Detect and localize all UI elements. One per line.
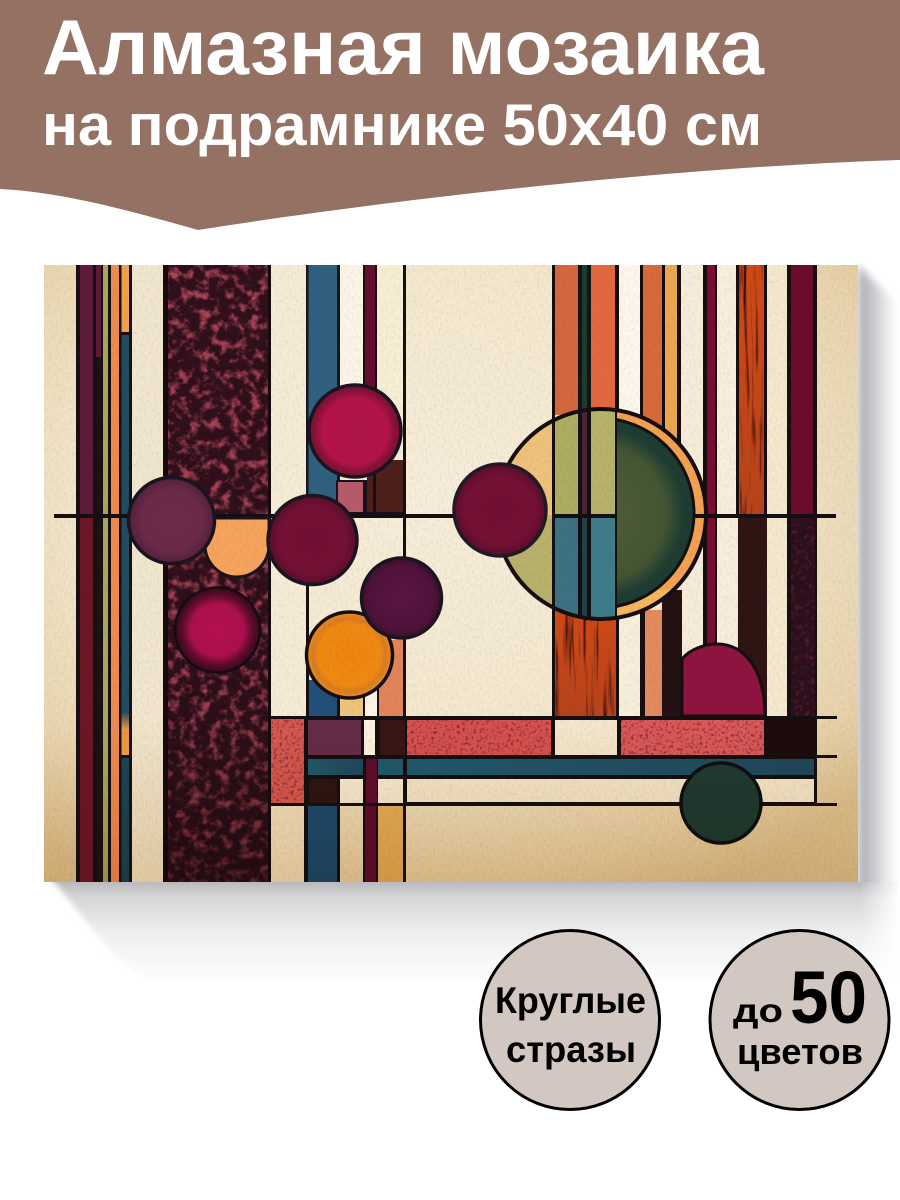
peach half circle: [205, 518, 269, 577]
circle: purple: [362, 558, 442, 638]
canvas drop shadow: [46, 265, 900, 985]
badge: round rhinestones: Круглые: [495, 980, 646, 1021]
canvas tint: [44, 720, 858, 882]
circle: dark green: [681, 763, 761, 843]
header banner: [0, 0, 900, 230]
canvas grain: [44, 265, 858, 882]
large segmented circle: [503, 407, 708, 621]
centre stripe group: [271, 265, 406, 882]
badge: round rhinestones: стразы: [506, 1029, 636, 1070]
circle: maroon centre: [268, 496, 357, 584]
badge: round rhinestones: [480, 930, 660, 1110]
circle: orange: [306, 612, 392, 698]
badge: up to 50 colours: цветов: [737, 1031, 863, 1072]
canvas artwork: [44, 265, 858, 882]
maroon dome: [682, 644, 765, 716]
title: Алмазная мозаика: Алмазная мозаика: [42, 3, 765, 91]
mottled burgundy column: [163, 265, 271, 882]
circle: crimson lower: [175, 588, 260, 672]
bottom horizontal bands: [271, 716, 837, 882]
circle: burgundy middle: [454, 464, 546, 556]
badge: up to 50 colours: 50: [790, 956, 867, 1039]
badge: up to 50 colours: до: [733, 992, 783, 1029]
circle: crimson top: [309, 385, 401, 477]
left stripe group: [76, 265, 163, 882]
subtitle: на подрамнике 50х40 см: на подрамнике 50х40 см: [42, 93, 762, 158]
right stripe group: [552, 265, 817, 716]
badge: up to 50 colours: [710, 930, 889, 1110]
circle: plum: [128, 478, 214, 564]
long horizontal line: [54, 514, 836, 518]
